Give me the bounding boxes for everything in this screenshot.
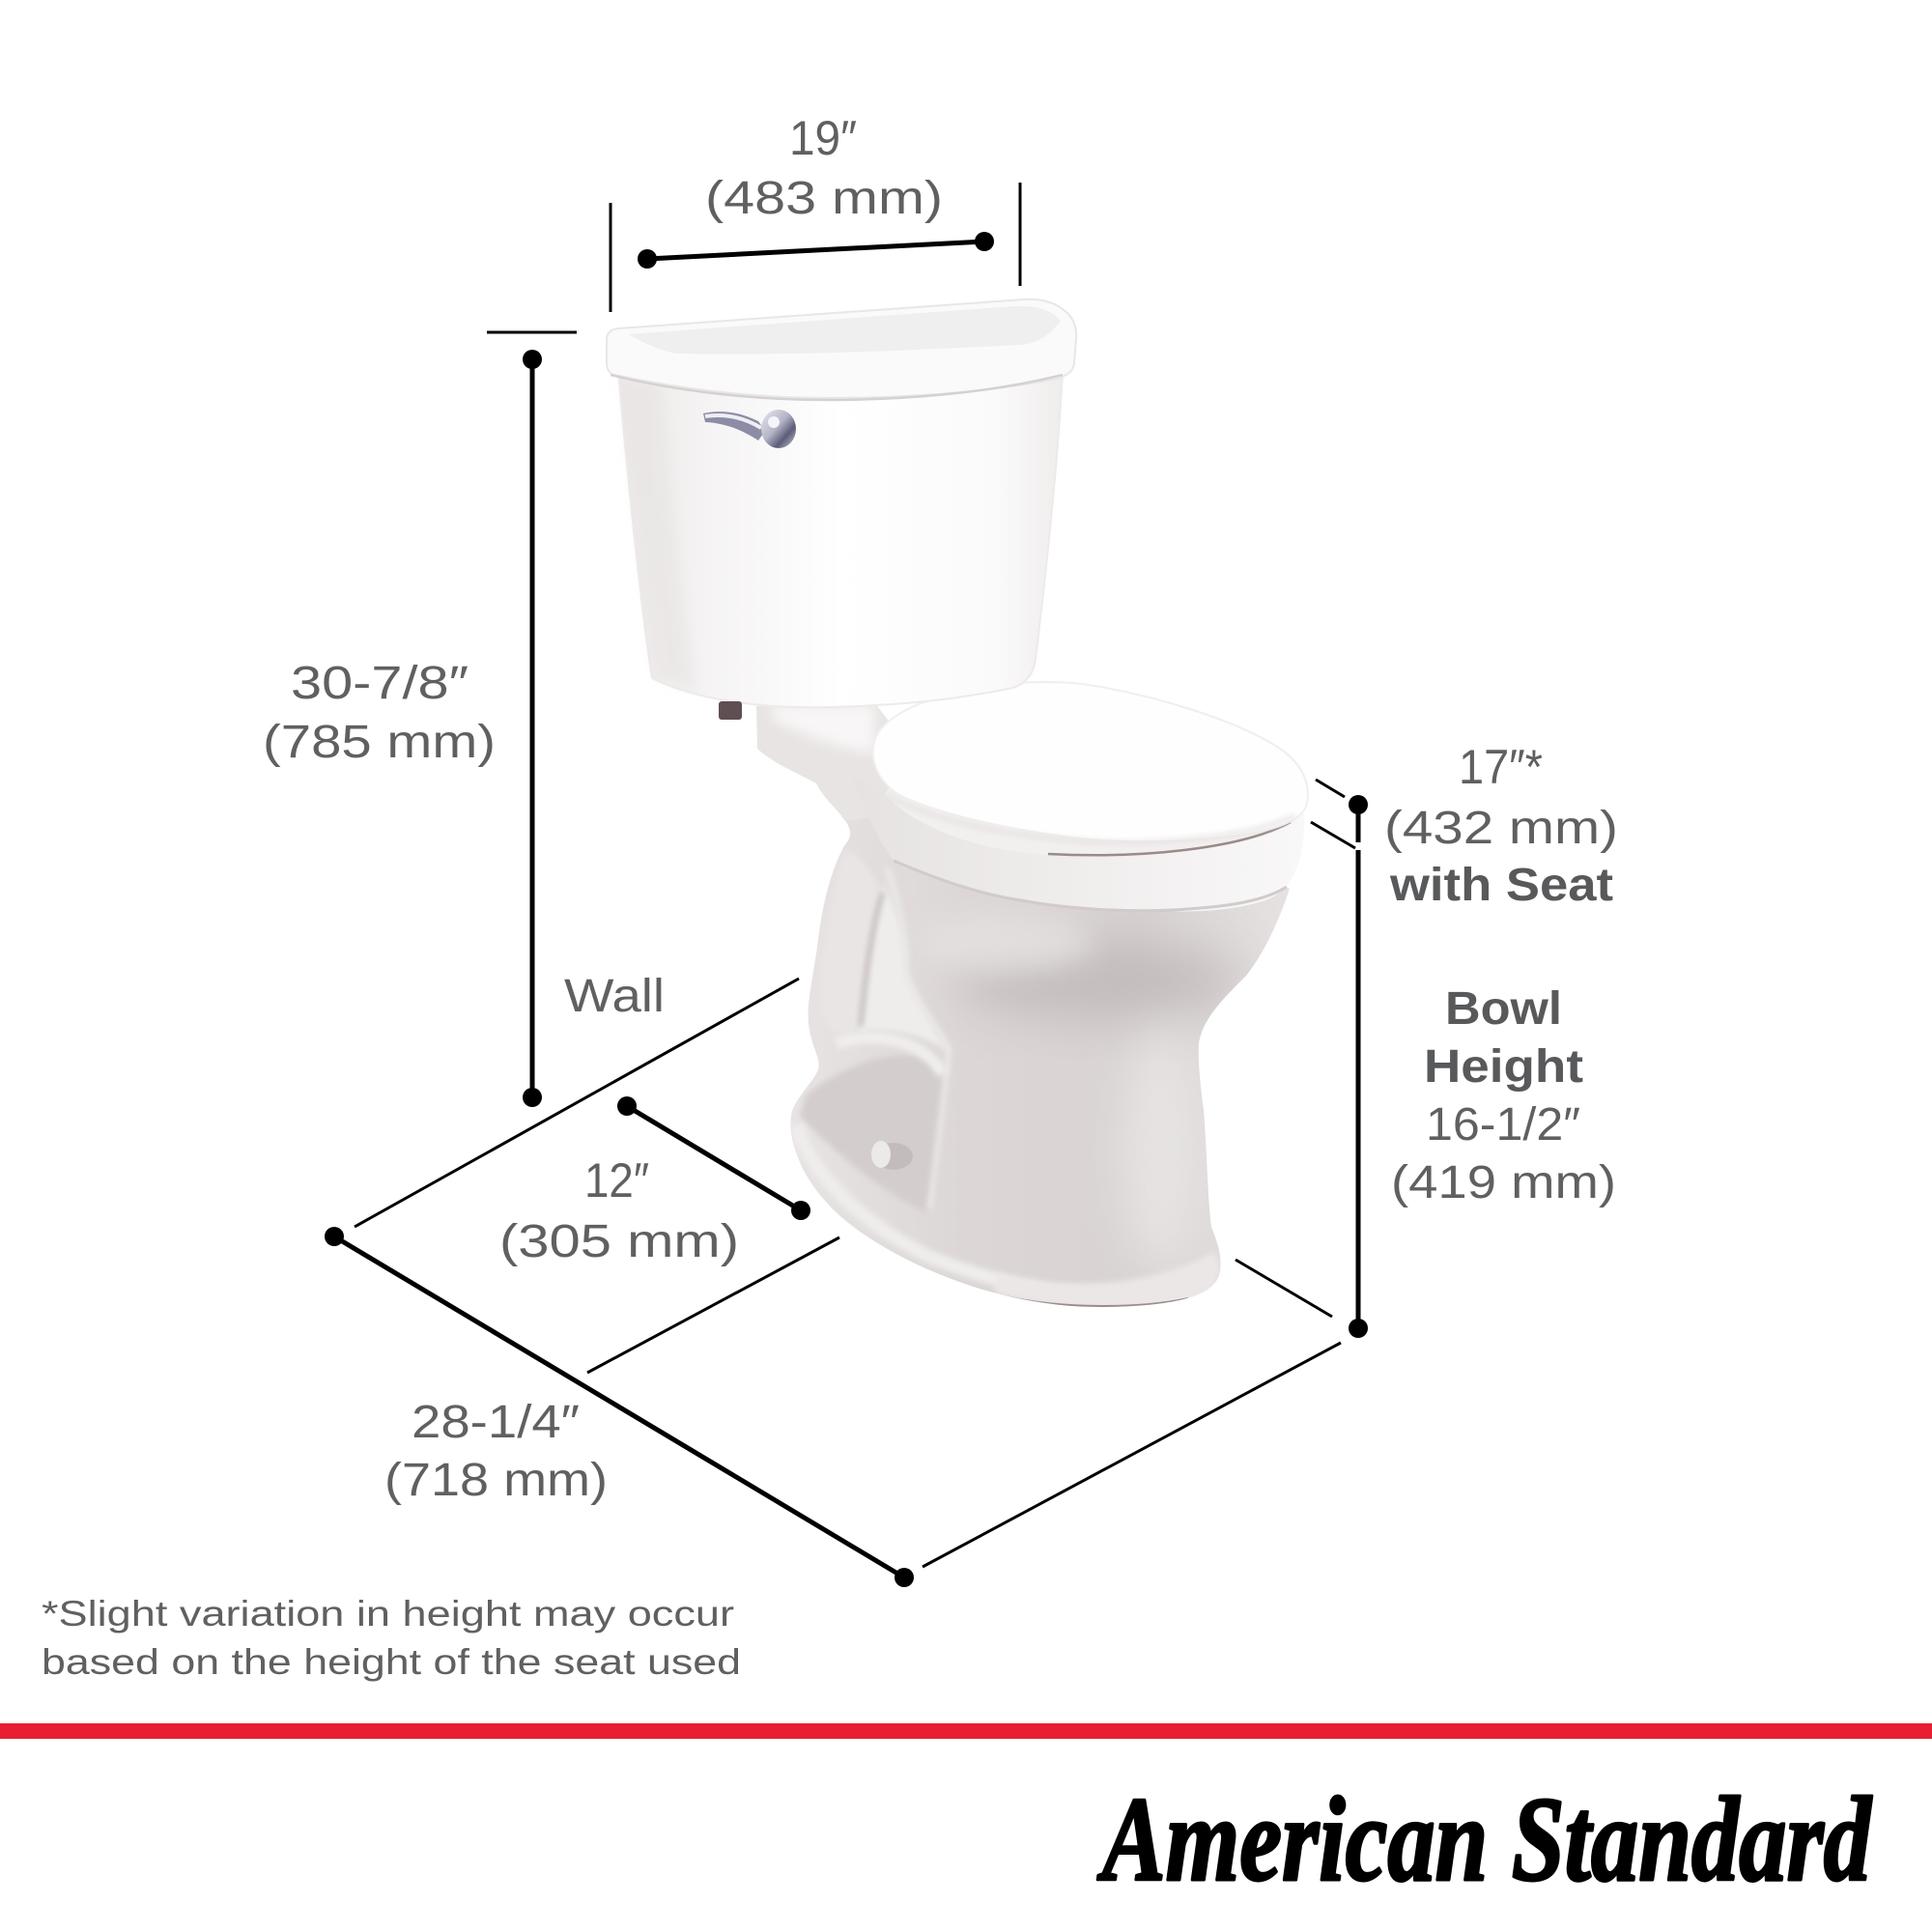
front floor line (923, 1343, 1341, 1567)
bowl interior details, clipped to the bowl outline (796, 850, 1246, 1308)
toilet illustration (607, 299, 1308, 1308)
bowl height dimension (1349, 850, 1368, 1338)
label: 12 inch (499, 1153, 739, 1267)
seat lid lower edge shade (885, 794, 1294, 842)
label: bowl height: Bowl (1445, 983, 1562, 1035)
label: 17 inch with seat (1384, 740, 1618, 911)
dimension lines (325, 183, 1368, 1587)
side panel (861, 891, 942, 1047)
label: bowl height: (419 mm) (1391, 1157, 1616, 1208)
rough-in dimension: 12 inch (617, 1096, 810, 1220)
arch inner shadow (861, 893, 883, 1026)
depth dimension: 28-1/4 inch (325, 1227, 914, 1587)
supply pipe (719, 701, 742, 720)
total height dimension: 30-7/8 inch (487, 332, 577, 1107)
tank lid (607, 299, 1076, 400)
floor bolt (871, 1141, 913, 1170)
base right foot (995, 1254, 1219, 1305)
footnote: based on the height of the seat used (42, 1642, 741, 1682)
seat gap shadow (1048, 822, 1291, 855)
tank side tone (623, 382, 696, 691)
lid underside line (611, 375, 1063, 400)
bowl rim (851, 777, 1304, 912)
label: bowl height (1391, 983, 1616, 1208)
seat ring (885, 773, 1296, 856)
label: 17 inch with seat: 17″* (1459, 740, 1543, 794)
tank neck (756, 696, 913, 821)
label: bowl height: Height (1424, 1041, 1583, 1093)
bowl right highlight (1119, 1032, 1190, 1257)
tank width dimension: 19 inch (611, 183, 1020, 312)
label: 28-1/4 inch (384, 1397, 608, 1506)
label: 30-7/8 inch (263, 658, 496, 768)
label: 19 inch (705, 111, 943, 224)
front base tick (1236, 1260, 1332, 1317)
toilet bowl (790, 802, 1290, 1308)
label: 19 inch: 19″ (789, 111, 857, 165)
bolt centre line (587, 1237, 839, 1373)
base rim highlight (796, 1129, 999, 1286)
label: bowl height: 16-1/2″ (1426, 1099, 1580, 1151)
seat height dimension (1311, 780, 1368, 848)
fold between trapway and bowl (887, 868, 949, 1209)
label: 19 inch: (483 mm) (705, 173, 943, 224)
label: 17 inch with seat: (432 mm) (1384, 803, 1618, 854)
bowl upper tone (943, 918, 1090, 977)
label: 12 inch: (305 mm) (499, 1216, 739, 1267)
red divider bar (0, 1723, 1932, 1739)
floor contact line (1005, 1296, 1188, 1306)
neck highlight (773, 705, 874, 753)
trapway curve highlight (837, 1038, 943, 1074)
label: 12 inch: 12″ (584, 1153, 649, 1208)
label: 30-7/8 inch: (785 mm) (263, 717, 496, 768)
label: 30-7/8 inch: 30-7/8″ (291, 658, 469, 709)
label: wall: Wall (564, 971, 665, 1022)
label: 28-1/4 inch: (718 mm) (384, 1455, 608, 1506)
wall line (355, 979, 799, 1227)
base recess (800, 1055, 946, 1212)
seat lid (873, 682, 1308, 841)
rim shadow line (894, 861, 1287, 911)
label: 17 inch with seat: with Seat (1389, 860, 1613, 911)
label: 28-1/4 inch: 28-1/4″ (412, 1397, 580, 1448)
bowl shadow (956, 942, 1246, 1019)
flush handle (703, 410, 796, 448)
tank body (618, 372, 1063, 707)
trapway outer arch (867, 891, 875, 922)
footnote: *Slight variation in height may occur (42, 1594, 734, 1634)
lid recess (628, 306, 1061, 355)
footnote (42, 1594, 741, 1682)
